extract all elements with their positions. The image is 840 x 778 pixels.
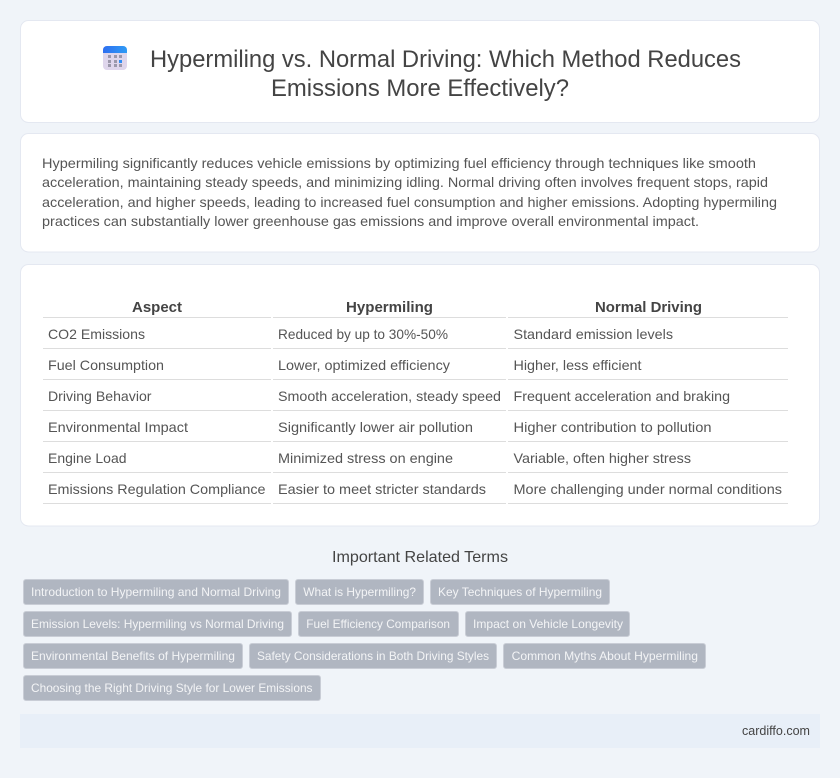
table row: Fuel Consumption: Fuel Consumption	[48, 357, 164, 373]
tag	[430, 580, 610, 604]
table row: Engine Load: Engine Load	[48, 450, 126, 466]
table row: Fuel Consumption: Higher, less efficient	[514, 357, 642, 373]
tag	[466, 612, 630, 636]
table row: Driving Behavior: Driving Behavior	[48, 388, 152, 404]
panel: summary paragraph	[20, 134, 820, 252]
text block: summary: acceleration, maintaining steady speeds, and minimizing idling. Normal driving often involves frequent stops, rapid	[42, 174, 768, 190]
tag	[24, 644, 242, 668]
tag: Key Techniques of Hypermiling	[438, 585, 602, 599]
table row: Driving Behavior	[43, 388, 788, 411]
tag	[298, 612, 458, 636]
tag: Choosing the Right Driving Style for Lower Emissions	[31, 681, 312, 695]
text block: summary: Hypermiling significantly reduces vehicle emissions by optimizing fuel efficiency through techniques like smooth	[42, 155, 756, 171]
heading: important related terms: Important Related Terms	[332, 549, 508, 566]
footer bar	[20, 714, 820, 748]
tag	[24, 612, 292, 636]
tag: Emission Levels: Hypermiling vs Normal Driving	[31, 617, 284, 631]
table row: Emissions Regulation Compliance: Easier to meet stricter standards	[278, 481, 486, 497]
table row: Emissions Regulation Compliance: More challenging under normal conditions	[514, 481, 782, 497]
table header row: Aspect	[132, 299, 182, 316]
text block: summary: acceleration, and higher speeds, leading to increased fuel consumption and higher emissions. Adopting hypermiling	[42, 194, 777, 210]
table row: Driving Behavior: Frequent acceleration and braking	[514, 388, 730, 404]
text block: summary: practices can substantially lower greenhouse gas emissions and improve overall environmental impact.	[42, 213, 699, 229]
tag: What is Hypermiling?	[303, 585, 416, 599]
table row: Environmental Impact: Higher contribution to pollution	[514, 419, 712, 435]
table row: Driving Behavior: Smooth acceleration, steady speed	[278, 388, 501, 404]
table row: Engine Load: Minimized stress on engine	[278, 450, 453, 466]
table header row	[43, 299, 788, 318]
tag	[296, 580, 424, 604]
panel: comparison table	[20, 264, 820, 526]
tag: Introduction to Hypermiling and Normal Driving	[31, 585, 281, 599]
tag: Safety Considerations in Both Driving Styles	[257, 649, 489, 663]
table header row: Normal Driving	[595, 299, 702, 316]
tag list: related terms	[24, 580, 706, 700]
table row: Environmental Impact	[43, 419, 788, 442]
table row: Emissions Regulation Compliance: Emissions Regulation Compliance	[48, 481, 266, 497]
tag	[24, 580, 288, 604]
tag	[24, 676, 320, 700]
footer credit: cardiffo.com	[742, 723, 810, 738]
icon: calendar	[103, 46, 127, 70]
tag: Impact on Vehicle Longevity	[473, 617, 623, 631]
table row: CO2 Emissions: Reduced by up to 30%-50%	[278, 326, 448, 342]
table row: Emissions Regulation Compliance	[43, 481, 788, 504]
table row: Fuel Consumption	[43, 357, 788, 380]
panel: title header	[20, 20, 820, 122]
table row: Environmental Impact: Significantly lower air pollution	[278, 419, 473, 435]
tag: Fuel Efficiency Comparison	[306, 617, 450, 631]
table row: CO2 Emissions: Standard emission levels	[514, 326, 673, 342]
table row: CO2 Emissions: CO2 Emissions	[48, 326, 145, 342]
title: Hypermiling vs. Normal Driving: Which Method Reduces	[150, 46, 741, 73]
table row: CO2 Emissions	[43, 326, 788, 349]
tag	[504, 644, 706, 668]
table row: Engine Load: Variable, often higher stress	[514, 450, 691, 466]
tag: Common Myths About Hypermiling	[512, 649, 698, 663]
table row: Fuel Consumption: Lower, optimized efficiency	[278, 357, 450, 373]
title: Emissions More Effectively?	[271, 75, 569, 102]
table row: Engine Load	[43, 450, 788, 473]
tag	[250, 644, 496, 668]
tag: Environmental Benefits of Hypermiling	[31, 649, 235, 663]
table row: Environmental Impact: Environmental Impact	[48, 419, 188, 435]
table header row: Hypermiling	[346, 299, 433, 316]
